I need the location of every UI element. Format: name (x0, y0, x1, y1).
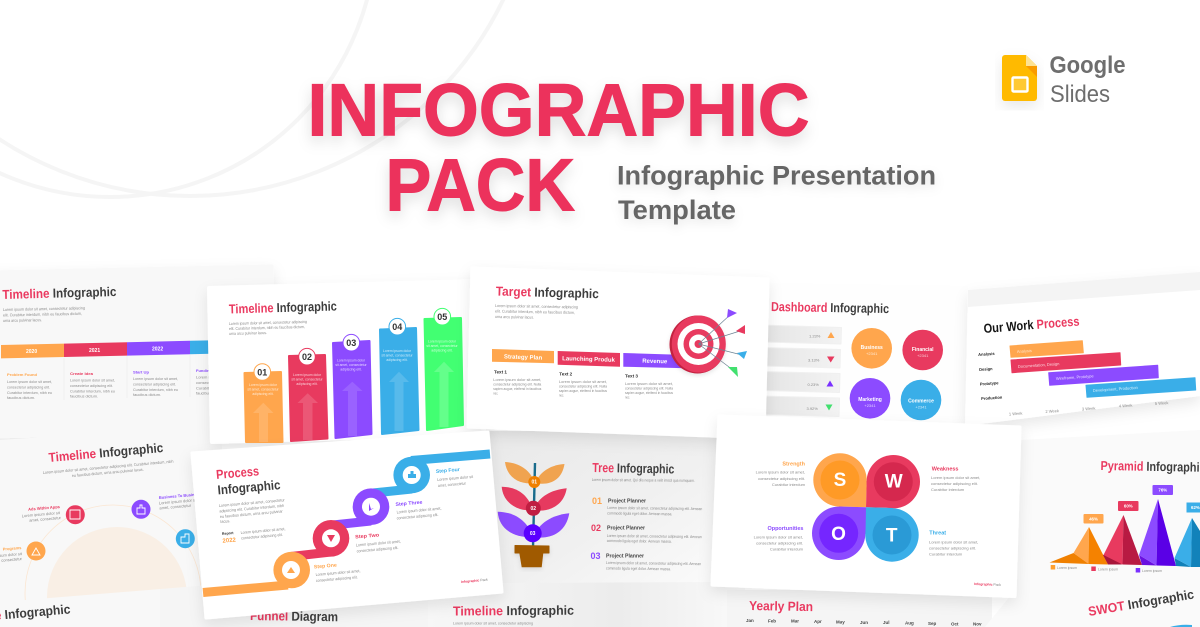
slide: pyramid infographic: Lorem ipsum (1142, 568, 1163, 573)
slide: process infographic: consectetur adipiscing elit. (396, 512, 439, 520)
slide: timeline table: faucibus dictum. (7, 395, 35, 400)
slide: pyramid infographic (985, 430, 1200, 627)
bar 01: 01 (257, 368, 267, 378)
petal O (812, 506, 866, 560)
slide: process infographic: 2022 (222, 537, 237, 545)
slide: dashboard infographic: Commerce (908, 398, 934, 404)
slide: circular timeline: Business To Business (159, 491, 202, 500)
slide: pyramid infographic: 76% (1158, 488, 1167, 493)
slide: SWOT infographic: Strength (782, 462, 806, 468)
slide: target infographic: Text 3 (625, 374, 638, 378)
Google Slides wordmark (1050, 52, 1126, 108)
slide: tree infographic: 03 (590, 551, 601, 561)
bar 04: sit amet, consectetur (381, 354, 414, 358)
slide: timeline table: Lorem ipsum dolor sit amet, consectetur adipiscing (3, 305, 85, 312)
slide: circular timeline: amet, consectetur (29, 515, 62, 523)
slide: timeline bars: urna arcu pulvinar lacus. (229, 330, 267, 336)
petal T: T (886, 526, 898, 547)
slide: tree infographic: Project Planner (608, 498, 646, 504)
slide: circular timeline: amet, consectetur (159, 503, 192, 510)
title: INFOGRAPHIC PACK: PACK (386, 144, 575, 226)
slide: timeline table: Curabitur interdum, nibh eu (133, 387, 178, 392)
slide: our work process gantt: Analysis (978, 351, 996, 357)
slide: tree infographic: Project Planner (607, 526, 645, 532)
slide: process infographic: Lorem ipsum dolor sit amet, consectetur (219, 497, 285, 508)
slide: SWOT infographic: Opportunities (767, 526, 804, 532)
slide: circular timeline: eu faucibus dictum, urna arcu pulvinar lacus. (72, 467, 144, 478)
bar 02: 02 (302, 352, 312, 362)
slide: SWOT infographic: consectetur adipiscing elit. (931, 481, 978, 486)
slide: target infographic: Lorem ipsum dolor sit amet, (625, 381, 673, 386)
slide: yearly plan: Yearly Plan (749, 598, 813, 614)
slide: target infographic: consectetur adipiscing elit. Nulla (559, 384, 608, 388)
slide: yearly plan: Apr (814, 619, 822, 624)
slide: timeline table: Curabitur interdum, nibh eu (70, 388, 115, 394)
slide: circular timeline: Lorem ipsum dolor sit (159, 497, 198, 505)
bar 04: 04 (392, 322, 402, 332)
petal S: S (834, 470, 846, 491)
slide: our work process gantt: Production (981, 394, 1003, 401)
slide: timeline bars: elit. Curabitur interdum, nibh eu faucibus dictum, (229, 324, 305, 331)
slide: our work process gantt (965, 272, 1200, 426)
petal W (866, 455, 920, 508)
slide: process infographic: Step Four (436, 467, 460, 475)
bar 03: 03 (346, 338, 356, 348)
slide: our work process gantt: 4 Week (1119, 403, 1133, 408)
slide: tree infographic: Lorem ipsum dolor sit amet, consectetur adipiscing elit. Aenean (606, 560, 701, 566)
slide: target infographic: elit. Curabitur interdum, nibh eu faucibus dictum, (495, 309, 575, 315)
slide: our work process gantt: 1 Week (1009, 411, 1023, 416)
slide: our work process gantt: Analysis (1017, 348, 1032, 354)
slide: target infographic: consectetur adipiscing elit. Nulla (625, 386, 674, 390)
slide: dashboard infographic: 3.13% (808, 358, 820, 362)
slide: our work process gantt: Design (979, 366, 993, 372)
icon: Google Slides logo (1002, 55, 1037, 101)
slide: SWOT infographic: Lorem ipsum dolor sit amet, (756, 470, 805, 474)
petal O: O (831, 524, 846, 545)
slide: process infographic: Process (215, 463, 260, 482)
slide: SWOT infographic: Weakness (932, 466, 959, 472)
slide: dashboard infographic: 1.23% (809, 334, 821, 338)
slide: timeline table: Start Up (133, 370, 150, 374)
slide: tree infographic: 01 (592, 496, 602, 506)
slide: tree infographic: Lorem ipsum dolor sit amet, consectetur adipiscing elit. Aenean (607, 533, 702, 539)
bar 02: sit amet, consectetur (291, 378, 324, 382)
slide: SWOT infographic: consectetur adipiscing elit. (756, 540, 803, 546)
slide: bottom-left timeline strip (0, 584, 200, 627)
slide: timeline bars (209, 281, 484, 442)
bar 04: adipiscing elit. (386, 358, 408, 362)
slide: process infographic: lacus. (220, 518, 231, 524)
slide: pyramid infographic: Lorem ipsum (1057, 565, 1078, 570)
slide: target infographic: Revenue (642, 359, 668, 365)
slide: circular timeline: Programs (3, 545, 22, 552)
slide: SWOT infographic: Lorem ipsum dolor sit amet, (929, 540, 978, 544)
slide: circular timeline: Timeline Infographic (48, 440, 164, 465)
petal T (865, 507, 919, 562)
bar 02: Lorem ipsum dolor (293, 373, 322, 377)
slide: bottom timeline: Lorem ipsum dolor sit amet, consectetur adipiscing (453, 620, 533, 626)
slide: process infographic: Step Three (395, 500, 423, 508)
slide: timeline table: faucibus dictum. (70, 394, 98, 398)
slide: timeline bars: Timeline Infographic (229, 298, 337, 316)
slide: tree infographic: commodo ligula eget dolor. Aenean massa. (607, 511, 672, 516)
bar 03: adipiscing elit. (340, 368, 362, 372)
slide: yearly plan: Jul (883, 620, 890, 625)
slide: target infographic: Infographic Pack (723, 424, 750, 428)
slide: timeline table: faucibus (196, 390, 211, 396)
slide: process infographic: Infographic (217, 477, 281, 497)
slide: tree infographic: commodo ligula eget dolor. Aenean massa. (607, 538, 672, 544)
Google Slides wordmark: Slides (1050, 81, 1110, 108)
slide: target infographic: Lorem ipsum dolor sit amet, (559, 379, 607, 384)
slide: timeline table: consectetur (196, 380, 217, 385)
bar 03: sit amet, consectetur (335, 363, 368, 367)
slide: tree infographic: 02 (591, 523, 601, 533)
slide: timeline table: 2021 (89, 348, 100, 354)
slide: bottom timeline: Timeline Infographic (453, 603, 574, 618)
slide: process infographic: amet, consectetur (438, 481, 467, 488)
slide: our work process gantt: Development, Production (1093, 385, 1138, 393)
slide: dashboard infographic: +2341 (864, 403, 876, 408)
slide: process infographic: Step Two (355, 532, 379, 540)
slide: our work process gantt: 3 Week (1082, 406, 1096, 411)
slide: yearly plan: Sep (928, 621, 937, 626)
step circles (273, 457, 430, 588)
slide: timeline table: urna arcu pulvinar lacus. (3, 317, 42, 323)
title: INFOGRAPHIC PACK (308, 68, 810, 226)
Google Slides wordmark: Google (1050, 52, 1126, 79)
slide: process infographic: Lorem ipsum dolor sit amet, (315, 568, 361, 577)
slide: yearly plan: Nov (973, 622, 982, 627)
slide: dashboard infographic: Financial (912, 347, 934, 353)
slide: dashboard infographic: 0.23% (808, 382, 819, 387)
bar 02 (289, 348, 328, 441)
slide: target infographic: Lorem ipsum dolor sit amet, consectetur adipiscing (495, 303, 578, 309)
slide: target infographic: Target Infographic (496, 284, 599, 301)
slide: tree infographic: Lorem ipsum dolor sit amet, consectetur adipiscing elit. Aenean (607, 505, 702, 511)
slide: our work process gantt: Prototype (980, 380, 999, 386)
slide: target infographic: nec. (559, 392, 564, 398)
slide: yearly plan: Jun (860, 620, 868, 625)
slide: yearly plan: May (836, 619, 845, 624)
slide: target infographic: nec. (625, 394, 630, 400)
slide: timeline table: Lorem ipsum dolor sit amet, (70, 378, 115, 382)
bar 01: adipiscing elit. (252, 392, 274, 396)
slide: timeline table: consectetur adipiscing elit. (70, 383, 113, 388)
slide: pyramid infographic: 60% (1124, 504, 1133, 509)
slide: SWOT infographic: consectetur adipiscing elit. (758, 476, 805, 481)
slide: yearly plan: Oct (951, 621, 959, 626)
slide: process infographic: consectetur adipiscing elit. (356, 545, 399, 553)
slide: yearly plan: Jan (746, 618, 754, 623)
subtitle: Template (618, 195, 736, 225)
slide: timeline table: 2020 (26, 349, 37, 355)
slide: timeline table: Curabitur (196, 386, 213, 390)
slide: funnel diagram: Funnel Diagram (250, 608, 338, 624)
petal S (813, 453, 867, 507)
slide: target infographic: consectetur adipiscing elit. Nulla (493, 382, 542, 386)
slide: pyramid infographic: 46% (1089, 516, 1098, 522)
icon: target with darts (670, 309, 747, 377)
slide: target infographic (468, 268, 768, 438)
slide: yearly plan (727, 590, 992, 627)
slide: tree infographic (488, 431, 722, 583)
slide: SWOT infographic: Threat (929, 530, 946, 536)
slide: SWOT infographic: Curabitur interdum (772, 482, 806, 487)
slide: process infographic: Lorem ipsum dolor sit (437, 474, 474, 482)
slide: process infographic: Lorem ipsum dolor sit amet, (240, 526, 286, 535)
slide: target infographic: Text 1 (494, 370, 507, 374)
slide: timeline table: consectetur adipiscing elit. (133, 382, 176, 386)
slide: dashboard infographic: +2341 (915, 404, 927, 410)
slide: process infographic: Infographic Pack (461, 578, 488, 584)
slide: timeline table: Lorem ipsum dolor sit amet, (133, 376, 178, 381)
slide: process infographic: Lorem ipsum dolor sit amet, (396, 506, 442, 514)
slide: target infographic: nec. (493, 390, 498, 396)
petal W: W (885, 472, 903, 492)
slide: yearly plan: Feb (768, 618, 776, 623)
slide: circular timeline: Lorem ipsum dolor sit (22, 510, 61, 518)
slide: tree infographic: Tree Infographic (592, 460, 674, 476)
slide: process infographic: eu faucibus dictum, urna arcu pulvinar (220, 508, 283, 519)
slide: timeline table: elit. Curabitur interdum, nibh eu faucibus dictum, (3, 311, 82, 317)
slide: target infographic: Strategy Plan (504, 354, 543, 362)
slide: yearly plan: Aug (905, 621, 914, 626)
subtitle (617, 160, 936, 225)
slide: circular timeline: Lorem ipsum dolor sit amet, consectetur adipiscing elit. Curabitur interdum, nibh (43, 459, 174, 475)
slide: dashboard infographic: Marketing (858, 397, 882, 403)
slide: yearly plan: Mar (791, 619, 799, 624)
slide: timeline table: consectetur adipiscing elit. (7, 384, 50, 390)
plant nodes: 01 (532, 480, 537, 486)
slide: process infographic: Step One (314, 562, 337, 570)
bar 04 (380, 318, 418, 434)
ribbon path (203, 454, 490, 592)
slide: SWOT infographic: Lorem ipsum dolor sit amet, (754, 534, 803, 540)
background arcs (0, 0, 538, 197)
plant leaves (498, 462, 569, 538)
slide: timeline table (0, 266, 276, 437)
subtitle: Infographic Presentation (617, 160, 936, 190)
bar 01: Lorem ipsum dolor (249, 383, 278, 387)
slide: SWOT title strip: SWOT Infographic (1087, 587, 1195, 619)
slide: timeline table: Curabitur interdum, nibh eu (7, 390, 52, 395)
slide: dashboard infographic: Dashboard Infographic (771, 299, 889, 316)
slide: target infographic: sapien augue, eleifend in faucibus (625, 390, 673, 395)
bar 05: adipiscing elit. (431, 348, 453, 352)
slide: SWOT infographic: consectetur adipiscing elit. (929, 546, 976, 550)
slide: dashboard infographic: 3.92% (806, 406, 818, 411)
slide: timeline table: Create Idea (70, 371, 94, 376)
slide: SWOT infographic (712, 416, 1020, 596)
slide: SWOT infographic: Lorem ipsum dolor sit amet, (931, 475, 980, 480)
slide: pyramid infographic: 62% (1191, 505, 1200, 510)
slide: process infographic: Lorem ipsum dolor sit amet, (356, 539, 401, 547)
slide: process infographic (192, 432, 502, 618)
plant stem (533, 463, 535, 548)
slide: our work process gantt: Wireframe, Prototype (1056, 373, 1095, 381)
slide: dashboard infographic: Business (861, 345, 883, 351)
slide: SWOT infographic: Curabitur interdum (929, 552, 963, 556)
slide: circular timeline (0, 434, 210, 600)
slide: our work process gantt: Our Work Process (983, 314, 1080, 336)
slide: dashboard infographic: +2341 (866, 351, 878, 356)
plant nodes: 03 (530, 531, 536, 537)
slide: timeline bars: Lorem ipsum dolor sit amet, consectetur adipiscing (229, 319, 307, 326)
slide: target infographic: urna arcu pulvinar lacus. (495, 314, 534, 320)
slide: dashboard infographic: +2341 (917, 353, 929, 358)
slide: target infographic: Lorem ipsum dolor sit amet, (493, 377, 541, 382)
slide: our work process gantt: 5 Week (1155, 400, 1169, 406)
slide: process infographic: consectetur adipiscing elit. (241, 532, 283, 540)
slide: our work process gantt: Documentation, Design (1018, 361, 1060, 369)
slide: timeline table: Lorem ipsum (196, 374, 220, 380)
slide: target infographic: Launching Produk (562, 356, 616, 364)
slide: process infographic: adipiscing elit. Curabitur interdum, nibh (219, 503, 284, 513)
slide: process infographic: Report (222, 531, 234, 536)
slide: timeline table: Funding (196, 368, 212, 373)
slide: tree infographic: commodo ligula eget dolor. Aenean massa. (606, 566, 671, 571)
slide: timeline table: Problem Found (7, 372, 38, 377)
slide: timeline table: Timeline Infographic (2, 284, 117, 302)
slide: timeline table: 2022 (152, 346, 163, 352)
slide: bottom timeline (428, 578, 745, 627)
slide: circular timeline: Ads Within Apps (28, 504, 61, 512)
slide: process infographic: consectetur adipiscing elit. (316, 574, 358, 583)
slide: target infographic: sapien augue, eleifend in faucibus (493, 386, 541, 391)
plant nodes: 02 (531, 506, 536, 512)
bar 01 (244, 364, 282, 442)
slide: SWOT infographic: Infographic Pack (974, 582, 1001, 587)
slide: SWOT infographic: Curabitur interdum (770, 546, 804, 552)
slide: tree infographic: Project Planner (606, 554, 644, 560)
slide: our work process gantt: 2 Week (1045, 408, 1059, 414)
title: INFOGRAPHIC PACK: INFOGRAPHIC (308, 68, 810, 152)
bar 05: sit amet, consectetur (426, 344, 459, 348)
slide: pyramid infographic: Lorem ipsum (1098, 566, 1119, 572)
slide: timeline table: Lorem ipsum dolor sit amet, (7, 379, 52, 384)
slide: funnel diagram (160, 586, 428, 627)
bar 03: Lorem ipsum dolor (337, 358, 366, 362)
slide: dashboard infographic (760, 283, 968, 432)
slide: tree infographic: Lorem ipsum dolor sit amet. Qui diis neque a velit imscil qua numquam. (592, 477, 695, 483)
bar 05 (424, 308, 463, 430)
bar 02: adipiscing elit. (296, 382, 318, 386)
bar 01: sit amet, consectetur (247, 388, 280, 392)
bar 03 (333, 334, 372, 438)
slide: target infographic: Text 2 (559, 372, 573, 376)
slide: target infographic: sapien augue, eleifend in faucibus (559, 388, 607, 393)
plant pot (515, 546, 549, 567)
bar 05: 05 (437, 312, 447, 322)
bar 04: Lorem ipsum dolor (383, 349, 412, 353)
slide: SWOT infographic: Curabitur interdum (931, 487, 965, 492)
slide: timeline table: faucibus dictum. (133, 392, 161, 397)
bar 05: Lorem ipsum dolor (428, 340, 457, 344)
plant nodes (524, 476, 542, 542)
